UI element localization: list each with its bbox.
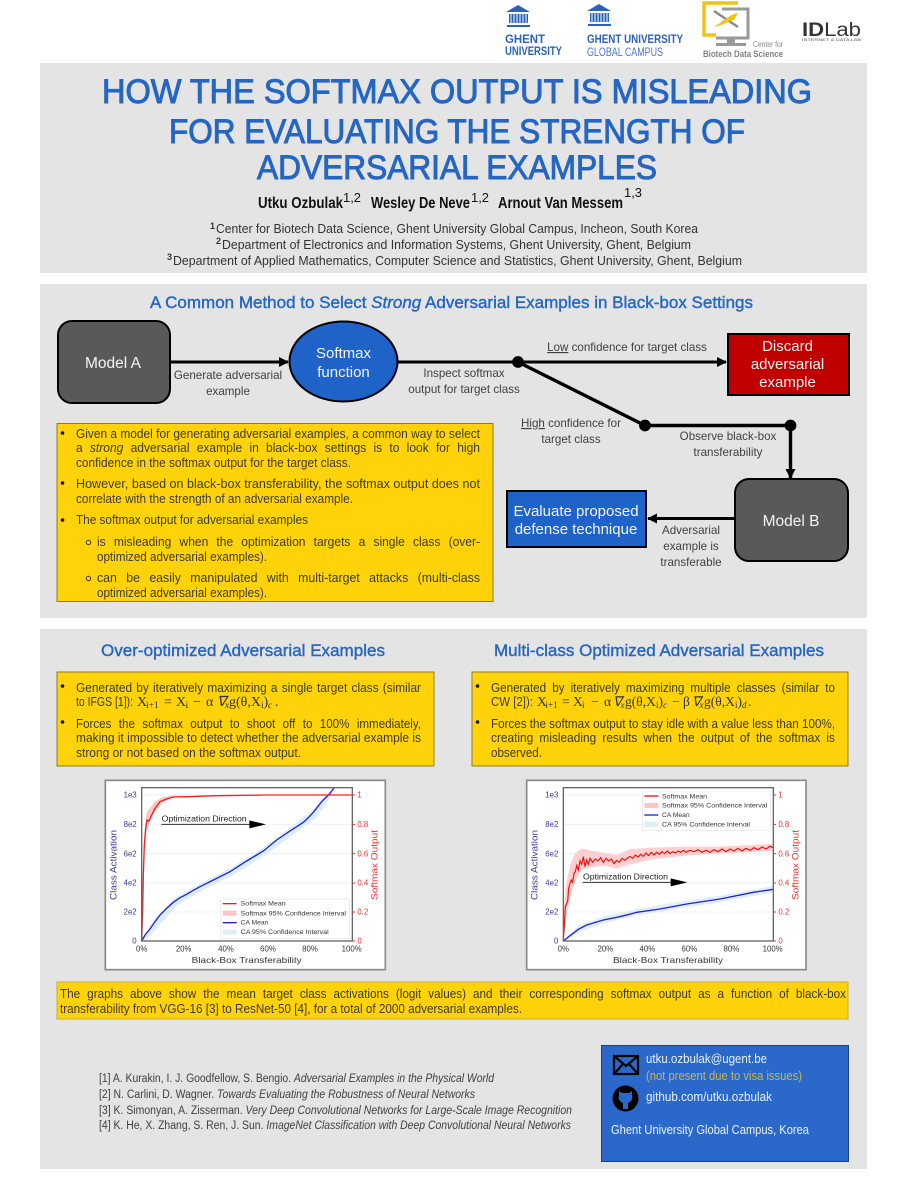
chart axes and tick labels: 80%: [723, 945, 739, 954]
chart axes and tick labels: 1: [778, 791, 783, 800]
arrow: Model B to evaluate: [648, 517, 735, 520]
chart axes and tick labels: 80%: [302, 945, 318, 954]
callout: multi-class bullets: i: [582, 700, 585, 710]
logo: Center for Biotech Data Science: [703, 3, 783, 60]
chart axes and tick labels: Softmax Output: [369, 829, 379, 900]
chart legend: [642, 791, 770, 830]
flow: Model A: Model A: [85, 355, 142, 372]
chart axes and tick labels: 8e2: [124, 820, 137, 829]
chart legend: [221, 899, 349, 938]
icon: email: [614, 1056, 638, 1074]
callout: multi-class bullets: ): [738, 694, 742, 709]
callout: over-optimized bullets: to IFGS [1]):: [76, 695, 133, 709]
callout: over-optimized bullets: .: [275, 695, 278, 710]
chart axes and tick labels: 40%: [218, 945, 234, 954]
chart axes and tick labels: 60%: [681, 945, 697, 954]
flow labels: transferability: [694, 446, 763, 459]
chart axes and tick labels: 0: [778, 937, 783, 946]
callout: multi-class bullets: g(θ,X: [625, 694, 656, 709]
flow: discard: adversarial: [751, 356, 824, 373]
logo: Ghent University Global Campus: [587, 4, 683, 59]
logo: Ghent University Global Campus: GLOBAL CAMPUS: [587, 47, 663, 59]
callout: over-optimized bullets: =: [164, 695, 172, 710]
callout: multi-class bullets: c: [663, 700, 667, 710]
references: [2] N. Carlini, D. Wagner. Towards Evaluating the Robustness of Neural Networks: [99, 1089, 475, 1101]
contact text: [611, 1052, 809, 1137]
flow labels: example is: [663, 540, 719, 553]
flow labels: [174, 341, 777, 569]
callout: over-optimized bullets: α: [206, 695, 214, 710]
callout: over-optimized bullets: i: [186, 701, 188, 711]
callout: common method bullets: is misleading when the optimization targets a single class (over-: [97, 535, 480, 549]
callout: multi-class bullets: β: [683, 694, 690, 709]
callout: over-optimized bullets: ∇: [217, 695, 229, 710]
logo: Ghent University: [505, 5, 562, 58]
flow labels: target class: [541, 433, 601, 446]
chart: multi-class softmax and class activation: [527, 780, 806, 970]
callout: multi-class bullets: x: [620, 700, 624, 710]
chart axes and tick labels: 4e2: [124, 879, 137, 888]
authors: Utku Ozbulak: [258, 195, 343, 212]
callout: common method bullets: Given a model for generating adversarial examples, a common way to select: [76, 427, 480, 441]
chart axes and tick labels: 1e3: [124, 791, 137, 800]
callout: over-optimized bullets: g(θ,X: [229, 695, 261, 710]
callout: multi-class bullets: −: [591, 694, 599, 709]
flow: discard: example: [759, 374, 816, 391]
affiliations: 2: [216, 236, 221, 246]
callout: common method bullets: However, based on black-box transferability, the softmax output does not: [76, 477, 481, 491]
callout: over-optimized bullets: [57, 672, 434, 766]
chart axes and tick labels: 1: [357, 791, 362, 800]
logo: Ghent University Global Campus: GHENT UNIVERSITY: [587, 34, 683, 46]
chart legend: CA Mean: [662, 812, 690, 819]
references: [4] K. He, X. Zhang, S. Ren, J. Sun. ImageNet Classification with Deep Convolutional Neural Networks: [99, 1120, 571, 1132]
authors: 1,2: [471, 190, 489, 205]
authors: 1,2: [343, 190, 361, 205]
heading: multi-class: Multi-class Optimized Adversarial Examples: [494, 641, 824, 660]
chart axes and tick labels: Class Activation: [530, 830, 540, 900]
callout: over-optimized bullets: x: [224, 701, 230, 711]
chart axes and tick labels: 0.8: [778, 820, 790, 829]
flow labels: Observe black-box: [680, 430, 777, 443]
logos: [505, 3, 862, 60]
callout: over-optimized bullets: ): [264, 695, 268, 710]
flow: softmax function: function: [317, 364, 370, 381]
callout: over-optimized bullets: i: [261, 701, 264, 711]
flow: discard: [728, 334, 849, 395]
chart axes and tick labels: 0.2: [778, 908, 789, 917]
flow labels: transferable: [660, 556, 722, 569]
chart axes and tick labels: 0: [554, 937, 559, 946]
references: [99, 1073, 572, 1132]
panel: contact: [602, 1046, 848, 1162]
flow: discard: Discard: [762, 338, 813, 355]
panel: examples and charts: [40, 629, 867, 1169]
chart: over-optimized softmax and class activation: [105, 780, 385, 970]
affiliations: Department of Electronics and Information Systems, Ghent University, Ghent, Belgium: [222, 237, 691, 252]
callout: over-optimized bullets: i+1: [146, 701, 159, 711]
flow labels: High confidence for: [521, 417, 621, 430]
chart axes and tick labels: 6e2: [124, 849, 137, 858]
chart legend: CA 95% Confidence Interval: [662, 822, 750, 829]
affiliations: Center for Biotech Data Science, Ghent University Global Campus, Incheon, South Korea: [216, 221, 699, 236]
flow: evaluate: [507, 491, 646, 547]
title: HOW THE SOFTMAX OUTPUT IS MISLEADING: [102, 73, 812, 111]
callout: multi-class bullets: i+1: [546, 700, 558, 710]
icon: github: [612, 1086, 638, 1112]
logo: IDLab: INTERNET & DATA LAB: [802, 38, 862, 42]
chart axes and tick labels: Class Activation: [108, 830, 118, 900]
callout: multi-class bullets: CW [2]):: [491, 695, 533, 709]
callout: common method bullets: optimized adversarial examples).: [97, 586, 267, 600]
chart axes and tick labels: Black-Box Transferability: [613, 955, 724, 965]
flow labels: Inspect softmax: [423, 367, 505, 380]
callout: graph explanation: [57, 982, 848, 1019]
references: [3] K. Simonyan, A. Zisserman. Very Deep Convolutional Networks for Large-Scale Image Recognition: [99, 1105, 572, 1117]
chart legend: CA Mean: [241, 920, 269, 927]
callout: over-optimized bullets: Generated by iteratively maximizing a single target class (similar: [76, 681, 421, 695]
flow: Model B: Model B: [763, 513, 819, 530]
callout: multi-class bullets: X: [573, 694, 583, 709]
callout: common method bullets: a strong adversarial example in black-box settings is to look for high: [76, 441, 480, 455]
chart axes and tick labels: 1e3: [545, 791, 559, 800]
contact text: Ghent University Global Campus, Korea: [611, 1123, 809, 1137]
chart axes and tick labels: 0.8: [357, 820, 369, 829]
flow labels: example: [206, 385, 250, 398]
affiliations: 1: [210, 221, 215, 231]
chart axes and tick labels: 0%: [136, 945, 147, 954]
flow: softmax function: Softmax: [316, 345, 372, 362]
callout: multi-class bullets: [472, 672, 848, 766]
chart axes and tick labels: 0.4: [778, 879, 790, 888]
contact text: (not present due to visa issues): [646, 1069, 802, 1083]
chart axes and tick labels: Black-Box Transferability: [192, 955, 302, 965]
callout: over-optimized bullets: −: [193, 695, 201, 710]
authors: [258, 185, 642, 212]
chart axes and tick labels: 100%: [763, 945, 783, 954]
chart axes and tick labels: 0.6: [357, 849, 369, 858]
callout: multi-class bullets: ): [658, 694, 663, 709]
callout: multi-class bullets: α: [604, 694, 611, 709]
callout: multi-class bullets: i: [735, 700, 738, 710]
logo: Ghent University: UNIVERSITY: [505, 46, 562, 58]
callout: multi-class bullets: observed.: [491, 746, 542, 760]
chart axes and tick labels: 0.4: [357, 879, 369, 888]
chart axes and tick labels: 40%: [639, 945, 655, 954]
chart axes and tick labels: 4e2: [545, 879, 558, 888]
affiliations: [167, 221, 742, 268]
chart axes and tick labels: 0.6: [778, 849, 790, 858]
callout: over-optimized bullets: c: [268, 701, 273, 711]
chart axes and tick labels: 0: [357, 937, 362, 946]
contact text: utku.ozbulak@ugent.be: [646, 1052, 767, 1066]
chart axes and tick labels: 0.2: [357, 908, 368, 917]
chart axes and tick labels: 2e2: [545, 908, 558, 917]
flow: evaluate: defense technique: [515, 521, 637, 538]
chart axes and tick labels: [530, 791, 800, 965]
callout: common method bullets: correlate with the strength of an adversarial example.: [76, 492, 353, 506]
callout: common method bullets: confidence in the softmax output for the target class.: [76, 456, 351, 470]
chart axes and tick labels: 100%: [342, 945, 362, 954]
authors: Arnout Van Messem: [498, 195, 623, 212]
flow: evaluate: Evaluate proposed: [513, 503, 639, 520]
chart legend: Softmax 95% Confidence Interval: [241, 910, 346, 917]
logo: Center for Biotech Data Science: Biotech Data Science: [703, 49, 783, 60]
authors: Wesley De Neve: [371, 195, 470, 212]
callout: multi-class bullets: Generated by iteratively maximizing multiple classes (similar to: [491, 681, 835, 695]
arrow: high confidence branch: [514, 358, 795, 478]
callout: multi-class bullets: x: [698, 700, 704, 710]
chart legend: Softmax Mean: [662, 793, 708, 800]
callout: common method bullets: optimized adversarial examples).: [97, 550, 267, 564]
title: FOR EVALUATING THE STRENGTH OF: [169, 113, 745, 151]
affiliations: 3: [167, 252, 172, 262]
chart legend: Softmax 95% Confidence Interval: [662, 803, 767, 810]
callout: multi-class bullets: creating misleading results when the output of the softmax is: [491, 731, 835, 745]
callout: multi-class bullets: −: [672, 694, 680, 709]
chart axes and tick labels: 0: [132, 937, 137, 946]
callout: multi-class bullets: Forces the softmax output to stay idle with a value less than 100%,: [491, 717, 835, 731]
callout: multi-class bullets: =: [562, 694, 570, 709]
chart annotation: optimization direction: Optimization Direction: [162, 814, 247, 823]
chart axes and tick labels: 0%: [558, 945, 569, 954]
heading: over-optimized: Over-optimized Adversarial Examples: [101, 641, 385, 660]
callout: multi-class bullets: ∇: [613, 694, 625, 709]
chart axes and tick labels: 20%: [597, 945, 613, 954]
chart axes and tick labels: Softmax Output: [790, 829, 800, 900]
chart axes and tick labels: 2e2: [124, 908, 137, 917]
chart annotation: optimization direction: Optimization Direction: [583, 872, 668, 881]
callout: multi-class bullets: X: [537, 694, 547, 709]
chart axes and tick labels: 6e2: [545, 849, 558, 858]
chart axes and tick labels: [108, 791, 379, 965]
logo: Ghent University: GHENT: [505, 34, 545, 46]
panel: common method: [40, 284, 867, 618]
callout: multi-class bullets: g(θ,X: [704, 694, 735, 709]
chart annotation: optimization direction: [161, 814, 266, 828]
title: ADVERSARIAL EXAMPLES: [257, 149, 657, 187]
chart axes and tick labels: 20%: [176, 945, 192, 954]
flow: Model A: [58, 321, 170, 403]
flow: softmax function: [290, 322, 398, 402]
callout: multi-class bullets: d: [742, 700, 747, 710]
chart annotation: optimization direction: [583, 872, 687, 886]
callout: over-optimized bullets: making it impossible to detect whether the adversarial example is: [76, 731, 421, 745]
callout: over-optimized bullets: strong or not based on the softmax output.: [76, 746, 301, 760]
callout: common method bullets: can be easily manipulated with multi-target attacks (multi-class: [97, 571, 480, 585]
contact text: github.com/utku.ozbulak: [646, 1090, 773, 1104]
chart axes and tick labels: 8e2: [545, 820, 558, 829]
callout: common method bullets: The softmax output for adversarial examples: [76, 513, 308, 527]
callout: multi-class bullets: i: [656, 700, 659, 710]
callout: multi-class bullets: ∇: [692, 694, 704, 709]
callout: over-optimized bullets: X: [137, 695, 147, 710]
logo: Center for Biotech Data Science: Center for: [753, 40, 783, 49]
panel: title and authors: [40, 63, 867, 273]
logo: IDLab: IDLab: [802, 20, 861, 41]
callout: over-optimized bullets: X: [176, 695, 186, 710]
authors: 1,3: [624, 185, 642, 200]
callout: graph explanation: The graphs above show the mean target class activations (logit values) and their corresponding softmax output as a function of black-box: [60, 987, 847, 1001]
callout: multi-class bullets: .: [748, 694, 751, 709]
callout: common method bullets: [57, 424, 493, 602]
flow labels: Low confidence for target class: [547, 341, 707, 354]
flow: Model B: [735, 479, 848, 561]
references: [1] A. Kurakin, I. J. Goodfellow, S. Bengio. Adversarial Examples in the Physical World: [99, 1073, 495, 1085]
arrow: Model A to softmax: [170, 360, 288, 364]
affiliations: Department of Applied Mathematics, Computer Science and Statistics, Ghent University, Ghent, Belgium: [173, 253, 742, 268]
flow labels: Generate adversarial: [174, 369, 282, 382]
heading: common method: A Common Method to Select Strong Adversarial Examples in Black-box Settings: [150, 293, 753, 312]
arrow: softmax to discard: [398, 360, 726, 364]
chart legend: Softmax Mean: [241, 901, 286, 908]
flow labels: output for target class: [408, 383, 520, 396]
callout: graph explanation: transferability from VGG-16 [3] to ResNet-50 [4], for a total of 2000 adversarial examples.: [60, 1002, 522, 1016]
callout: over-optimized bullets: Forces the softmax output to shoot off to 100% immediately,: [76, 717, 421, 731]
chart legend: CA 95% Confidence Interval: [241, 929, 329, 936]
title: [102, 73, 812, 187]
flow labels: Adversarial: [662, 524, 720, 537]
chart axes and tick labels: 60%: [260, 945, 276, 954]
